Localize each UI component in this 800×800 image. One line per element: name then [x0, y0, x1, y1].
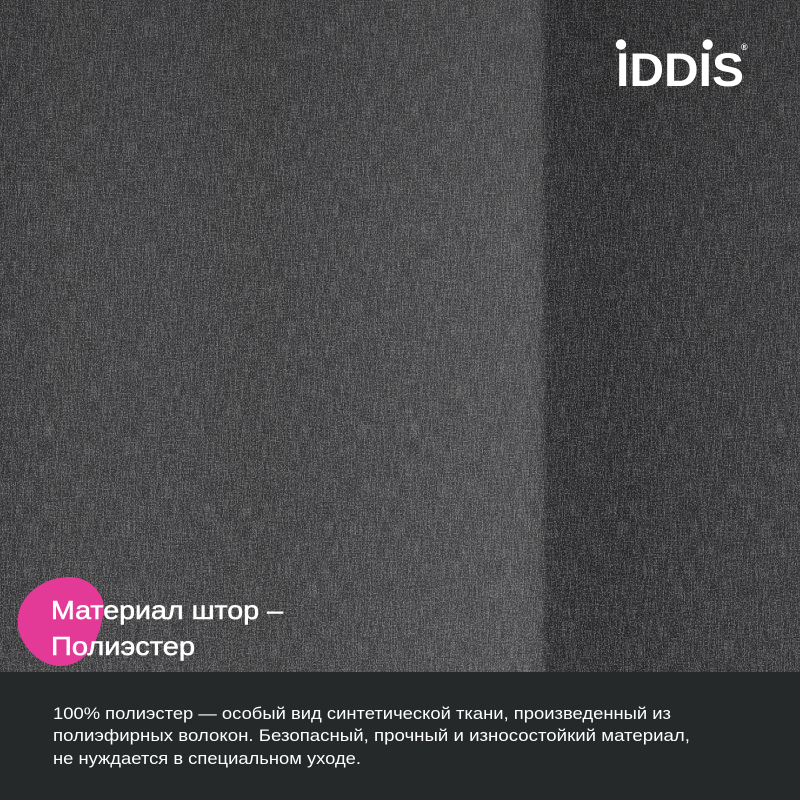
heading: Полиэстер: [51, 631, 195, 661]
description text: 100% полиэстер — особый вид синтетической ткани, произведенный из: [53, 704, 671, 723]
description text: не нуждается в специальном уходе.: [53, 749, 361, 768]
logo: iDDiS: ®: [741, 42, 748, 52]
description text: полиэфирных волокон. Безопасный, прочный и износостойкий материал,: [53, 726, 690, 745]
heading: [51, 595, 284, 661]
description text: [53, 704, 690, 768]
bottom panel: [0, 672, 800, 800]
pink blob: [18, 577, 104, 666]
logo: iDDiS: IDDIS: [616, 43, 744, 96]
heading: Материал штор –: [51, 595, 284, 625]
